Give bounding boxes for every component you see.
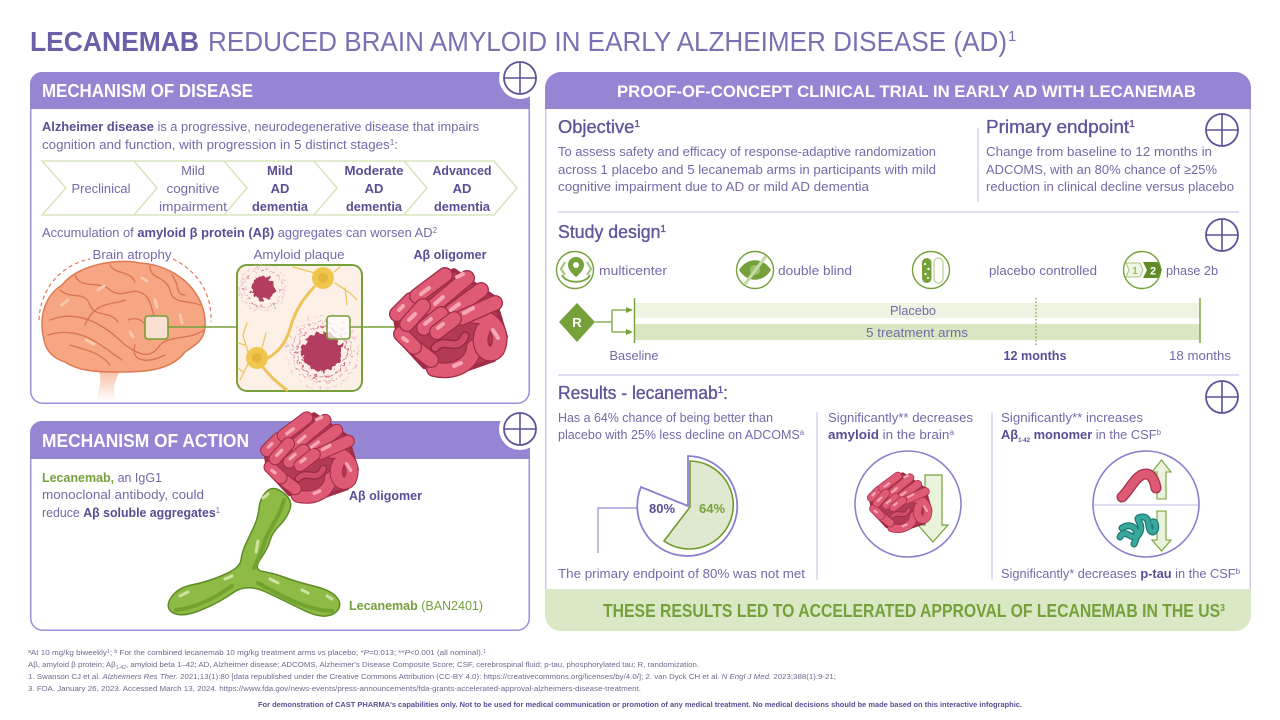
result: monomer and p-tau: [1001, 410, 1241, 581]
text: lecanemab description: reduce Aβ soluble aggregates: [42, 505, 223, 520]
result: monomer and p-tau: b: [1157, 428, 1162, 437]
footnotes: 1. Swanson CJ et al. Alzheimers Res Ther. 2021;13(1):80 [data republished under the Creative Commons Attribution (CC-BY 4.0): https://creativecommons.org/licenses/by/4.0/]; 2. van Dyck CH et al. N Engl J Med. 2023;388(1):9-21;: [28, 672, 836, 681]
chevrons: five disease stages: Moderate: [344, 163, 404, 178]
chevrons: five disease stages: [42, 161, 517, 215]
chart: pie 80 percent endpoint and 64 percent result: 80%: [649, 501, 675, 516]
section: primary endpoint: Primary endpoint: [986, 117, 1122, 137]
label: multicenter: multicenter: [599, 263, 668, 278]
heading: study design: Study design: [558, 222, 662, 242]
result: ADCOMS chance: Has a 64% chance of being better than: [558, 410, 773, 425]
panel header: mechanism of disease: [30, 72, 530, 109]
heading: results: Results - lecanemab: [558, 383, 722, 403]
panel header: clinical trial: [545, 72, 1251, 109]
divider: [977, 128, 979, 202]
chevrons: five disease stages: Mild: [267, 163, 293, 178]
chevrons: five disease stages: AD: [365, 181, 383, 196]
section: objective: cognitive impairment due to AD or mild AD dementia: [558, 179, 870, 194]
panel header: mechanism of disease: MECHANISM OF DISEASE: [42, 81, 253, 101]
icon: arrow up: [1152, 460, 1171, 499]
icon: expand study design: [1206, 219, 1238, 251]
text: Alzheimer disease description: 1: [390, 138, 395, 147]
illustration: brain with atrophy: [39, 259, 211, 401]
label: placebo controlled: placebo controlled: [989, 263, 1097, 278]
illustration: amyloid monomer: [1122, 474, 1156, 497]
section: primary endpoint: 1: [1129, 119, 1135, 130]
icon: arrow down: [918, 475, 948, 542]
icon: multicenter: [556, 252, 594, 288]
section: objective: [558, 117, 936, 194]
icon: expand endpoint: [1206, 114, 1238, 146]
icon: placebo controlled: [912, 252, 950, 288]
result: ADCOMS chance: The primary endpoint of 80% was not met: [558, 566, 805, 581]
chevrons: five disease stages: AD: [453, 181, 471, 196]
disclaimer: For demonstration of CAST PHARMA's capabilities only. Not to be used for medical communication or promotion of any medical treatment. No medical decisions should be made based on this interactive infographic.: [258, 700, 1022, 709]
icon: expand action panel: [499, 408, 541, 450]
divider: [558, 211, 1239, 213]
text: Alzheimer disease description: [42, 119, 479, 152]
banner: accelerated approval: [545, 589, 1251, 631]
label: phase 2b: phase 2b: [1166, 263, 1218, 278]
panel header: mechanism of action: [30, 421, 530, 459]
footnotes: For the combined lecanemab 10 mg/kg treatment arms vs placebo; *: [117, 648, 364, 657]
label: brain atrophy: Brain atrophy: [92, 247, 172, 262]
banner: accelerated approval: 3: [1220, 603, 1225, 614]
illustration: amyloid beta oligomer: [394, 270, 506, 374]
result: monomer and p-tau: b: [1236, 567, 1241, 576]
randomization diamond: R: [572, 315, 582, 330]
divider: [817, 412, 992, 580]
chevrons: five disease stages: dementia: [434, 199, 491, 214]
inset box on brain: [145, 316, 168, 339]
footnotes: 1-42: [116, 665, 126, 671]
text: accumulation of amyloid: 2: [433, 226, 438, 235]
text: lecanemab description: 1: [216, 506, 221, 515]
result: monomer and p-tau: Significantly** increases: [1001, 410, 1144, 425]
chart: pie 80 percent endpoint and 64 percent result: [598, 456, 737, 556]
text: accumulation of amyloid: Accumulation of amyloid β protein (Aβ) aggregates can worsen AD: [42, 225, 434, 240]
icon: phase 2b: 1: [1132, 266, 1138, 277]
footnotes: Aβ, amyloid β protein; Aβ: [28, 660, 113, 669]
illustration: lecanemab antibody: [168, 488, 340, 616]
connector: brain to plaque: [168, 326, 237, 328]
section: primary endpoint: [986, 117, 1234, 194]
footnotes: P=0.013; ** P<0.001 (all nominal).: [364, 648, 479, 657]
footnotes: a: [28, 649, 31, 655]
result: ADCOMS chance: a: [800, 428, 805, 437]
result: amyloid decrease: [828, 410, 974, 557]
text: lecanemab description: Lecanemab, an IgG1: [42, 470, 162, 485]
heading: study design: 1: [661, 224, 666, 235]
result: monomer and p-tau: Aβ: [1001, 427, 1018, 442]
footnotes: 3. FDA. January 26, 2023. Accessed March 13, 2024. https://www.fda.gov/news-events/press-announcements/fda-grants-accelerated-approval-alzheimers-disease-treatment.: [28, 684, 641, 693]
icon: phase 2b: 2: [1150, 266, 1156, 278]
chevrons: five disease stages: Mild: [181, 163, 205, 178]
section: objective: To assess safety and efficacy of response-adaptive randomization: [558, 144, 936, 159]
diagram: study timeline: 18 months: [1169, 348, 1232, 363]
text: lecanemab description: monoclonal antibody, could: [42, 487, 204, 502]
text: Alzheimer disease description: Alzheimer disease is a progressive, neurodegenerative disease that impairs: [42, 119, 479, 134]
panel: mechanism of disease: [30, 57, 541, 403]
footnotes: [28, 648, 836, 693]
chevrons: five disease stages: dementia: [252, 199, 309, 214]
section: objective: 1: [634, 119, 640, 130]
footnotes: ;: [110, 648, 114, 657]
title: REDUCED BRAIN AMYLOID IN EARLY ALZHEIMER DISEASE (AD): [208, 26, 1007, 57]
icon: double blind: [736, 252, 774, 288]
result: monomer and p-tau: 1-42: [1018, 438, 1031, 444]
title: LECANEMAB: [30, 26, 199, 57]
section: objective: Objective: [558, 117, 633, 137]
illustration: oligomer bound to antibody: [264, 414, 357, 500]
footnotes: , amyloid beta 1–42; AD, Alzheimer disease; ADCOMS, Alzheimer's Disease Composite Score; CSF, cerebrospinal fluid; p-tau, phosphorylated tau; R, randomization.: [126, 660, 699, 669]
panel header: clinical trial: PROOF-OF-CONCEPT CLINICAL TRIAL IN EARLY AD WITH LECANEMAB: [617, 82, 1196, 101]
label: amyloid beta oligomer: Aβ oligomer: [414, 247, 486, 262]
footnotes: At 10 mg/kg biweekly: [31, 648, 107, 657]
band: treatment arms: [635, 324, 1200, 340]
result: monomer and p-tau: monomer: [1030, 427, 1092, 442]
text: Alzheimer disease description: :: [394, 137, 398, 152]
result: ADCOMS chance: [558, 410, 805, 581]
band: placebo: Placebo: [890, 303, 936, 318]
label: lecanemab BAN2401: Lecanemab (BAN2401): [349, 598, 483, 613]
panel header: mechanism of action: MECHANISM OF ACTION: [42, 431, 249, 451]
panel: mechanism of action: [30, 408, 541, 630]
label: oligomer: Aβ oligomer: [349, 488, 422, 503]
chevrons: five disease stages: dementia: [346, 199, 403, 214]
text: Alzheimer disease description: cognition and function, with progression in 5 distinct stages: [42, 137, 381, 152]
diagram: study timeline: [559, 298, 1232, 363]
section: primary endpoint: reduction in clinical decline versus placebo: [986, 179, 1234, 194]
footnotes: 1: [107, 649, 110, 655]
panel: proof-of-concept clinical trial: [545, 72, 1251, 631]
chevrons: five disease stages: AD: [271, 181, 289, 196]
band: treatment arms: 5 treatment arms: [866, 325, 969, 340]
section: primary endpoint: ADCOMS, with an 80% chance of ≥25%: [986, 162, 1217, 177]
illustration: small oligomer: [870, 473, 931, 531]
section: primary endpoint: Change from baseline to 12 months in: [986, 144, 1212, 159]
arrows: randomization branches: [595, 307, 633, 335]
footnotes: 1: [483, 649, 486, 655]
title: 1: [1008, 28, 1016, 45]
randomization diamond: [559, 303, 595, 342]
result: monomer and p-tau: in the CSF: [1096, 427, 1157, 442]
result: monomer and p-tau: Significantly* decreases p-tau in the CSF: [1001, 566, 1237, 581]
diagram: study timeline: 12 months: [1004, 348, 1066, 363]
diagram: study timeline: Baseline: [610, 348, 658, 363]
result: amyloid decrease: amyloid in the brain: [828, 427, 947, 442]
icon: expand results: [1206, 381, 1238, 413]
result: amyloid decrease: a: [949, 428, 955, 437]
icon: expand disease panel: [499, 57, 541, 99]
text: lecanemab description: [42, 470, 221, 520]
illustration: amyloid plaque and neurons: [237, 265, 362, 391]
chevrons: five disease stages: Preclinical: [72, 181, 131, 196]
chevrons: five disease stages: cognitive: [166, 181, 220, 196]
chart: pie 80 percent endpoint and 64 percent result: 64%: [699, 501, 725, 516]
inset box on plaque: [327, 316, 350, 339]
label: double blind: double blind: [778, 263, 852, 278]
connector: plaque to oligomer: [350, 326, 405, 328]
label: amyloid plaque: Amyloid plaque: [254, 247, 344, 262]
result: amyloid decrease: Significantly** decreases: [828, 410, 974, 425]
divider: [558, 374, 1239, 376]
result: ADCOMS chance: placebo with 25% less decline on ADCOMS: [558, 427, 809, 442]
chevrons: five disease stages: impairment: [159, 199, 227, 214]
footnotes: b: [114, 649, 118, 655]
icon: phase 2b: [1124, 252, 1162, 288]
band: placebo: [635, 303, 1200, 318]
chevrons: five disease stages: Advanced: [432, 163, 492, 178]
section: objective: across 1 placebo and 5 lecanemab arms in participants with mild: [558, 162, 936, 177]
icon: arrow down: [1152, 511, 1171, 551]
illustration: p-tau tangle: [1120, 517, 1156, 544]
heading: results: :: [723, 383, 728, 403]
heading: results: 1: [718, 385, 724, 396]
